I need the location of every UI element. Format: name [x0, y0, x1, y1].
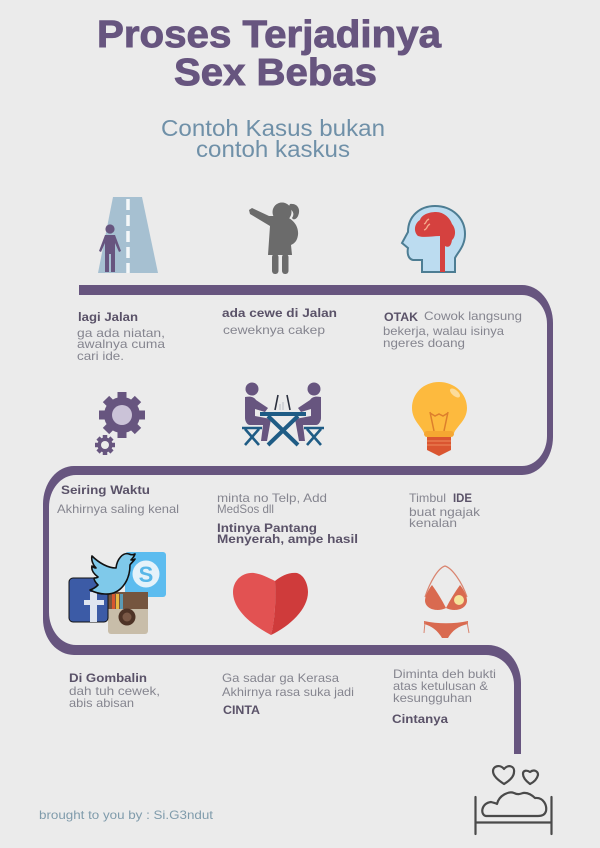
text: minta no telp: Intinya Pantang: [217, 521, 317, 535]
text: otak: bekerja, walau isinya: [383, 324, 504, 338]
text: di gombalin: Di Gombalin: [69, 671, 147, 685]
title: [97, 14, 442, 94]
text: cinta: Ga sadar ga Kerasa: [222, 671, 339, 685]
text: diminta bukti: Cintanya: [392, 712, 448, 726]
text: timbul ide: kenalan: [409, 516, 457, 530]
text: cinta: [222, 671, 354, 717]
icon: two people at table: [242, 382, 324, 445]
credit: brought to you by : Si.G3ndut: [39, 808, 214, 822]
text: lagi jalan: awalnya cuma: [77, 337, 165, 351]
winding timeline path: [43, 285, 553, 754]
icon: light bulb: [412, 382, 467, 456]
text: diminta bukti: Diminta deh bukti: [393, 667, 496, 681]
text: otak: [383, 309, 522, 350]
text: ada cewe di jalan: ada cewe di Jalan: [222, 306, 337, 320]
subtitle: [161, 115, 385, 162]
text: timbul ide: Timbul: [409, 491, 446, 505]
text: otak: OTAK: [384, 310, 418, 324]
text: otak: ngeres doang: [383, 336, 465, 350]
text: cinta: CINTA: [223, 703, 260, 717]
text: lagi jalan: lagi Jalan: [78, 310, 138, 324]
text: minta no telp: MedSos dll: [217, 502, 274, 516]
text: timbul ide: [409, 491, 481, 530]
subtitle: Contoh Kasus bukan: [161, 115, 385, 141]
text: timbul ide: IDE: [453, 491, 472, 505]
text: di gombalin: [69, 671, 160, 710]
icon: heart: [233, 573, 308, 635]
text: ada cewe di jalan: [222, 306, 337, 337]
text: diminta bukti: [392, 667, 496, 726]
icon: social media logos: [69, 552, 166, 634]
icon: bed with hearts: [476, 766, 552, 834]
text: minta no telp: Menyerah, ampe hasil: [217, 532, 358, 546]
icon: bikini: [424, 566, 469, 638]
text: lagi jalan: ga ada niatan,: [77, 326, 165, 340]
subtitle: contoh kaskus: [196, 136, 350, 162]
text: minta no telp: minta no Telp, Add: [217, 491, 327, 505]
text: cinta: Akhirnya rasa suka jadi: [222, 685, 354, 699]
icon: social media logos: S: [139, 562, 153, 587]
text: otak: Cowok langsung: [424, 309, 522, 323]
text: lagi jalan: cari ide.: [77, 349, 124, 363]
text: diminta bukti: atas ketulusan &: [393, 679, 488, 693]
text: diminta bukti: kesungguhan: [393, 691, 472, 705]
text: di gombalin: dah tuh cewek,: [69, 684, 160, 698]
title: Proses Terjadinya: [97, 14, 442, 56]
text: lagi jalan: [77, 310, 165, 363]
text: ada cewe di jalan: ceweknya cakep: [223, 323, 325, 337]
text: minta no telp: [217, 491, 358, 546]
icon: head with brain: [402, 206, 465, 272]
text: seiring waktu: Akhirnya saling kenal: [57, 502, 179, 516]
text: di gombalin: abis abisan: [69, 696, 134, 710]
icon: person on road: [98, 197, 158, 273]
icon: gears: [95, 392, 145, 455]
text: seiring waktu: [57, 483, 179, 516]
icon: woman pointing: [249, 202, 299, 274]
title: Sex Bebas: [174, 52, 377, 94]
text: timbul ide: buat ngajak: [409, 505, 481, 519]
text: seiring waktu: Seiring Waktu: [61, 483, 150, 497]
